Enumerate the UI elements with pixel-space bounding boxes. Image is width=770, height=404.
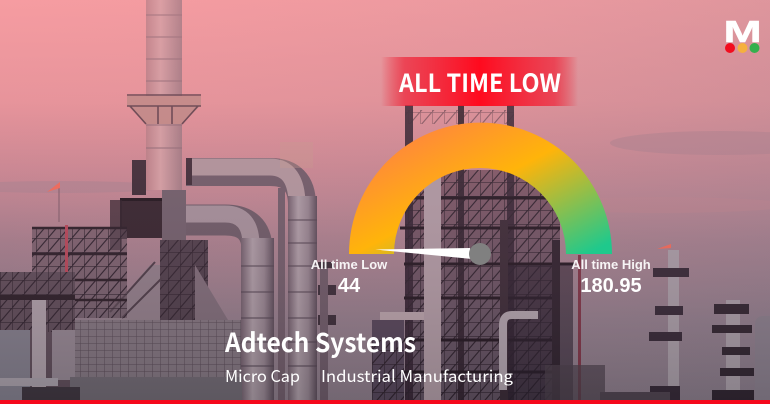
banner: all time low (381, 57, 578, 106)
all time high label: All time High (571, 257, 651, 272)
market cap tag: Micro Cap (225, 363, 300, 387)
lower-left machinery (0, 272, 75, 400)
all time low label: All time Low (311, 257, 388, 272)
gauge hub (469, 243, 491, 265)
bottom red bar (0, 400, 770, 404)
banner text: ALL TIME LOW (398, 64, 561, 100)
refinery tower centre (405, 105, 413, 400)
all time high label (571, 257, 651, 297)
central dark structure (132, 160, 146, 195)
industry tag: Industrial Manufacturing (321, 363, 513, 387)
lower pipe (172, 220, 257, 400)
gauge (349, 123, 612, 265)
all time low label (311, 257, 388, 297)
left frame (32, 228, 127, 318)
upper pipe (186, 172, 302, 400)
company name: Adtech Systems (224, 323, 416, 360)
brand logo (724, 15, 762, 53)
logo dots (725, 43, 760, 53)
right towers (668, 250, 679, 400)
gauge needle (375, 248, 472, 259)
logo letter M: M (724, 15, 762, 49)
low value: 44 (338, 275, 361, 297)
gauge arc (349, 123, 612, 254)
left stack (146, 0, 182, 190)
base block (75, 320, 241, 378)
high value: 180.95 (580, 275, 642, 297)
